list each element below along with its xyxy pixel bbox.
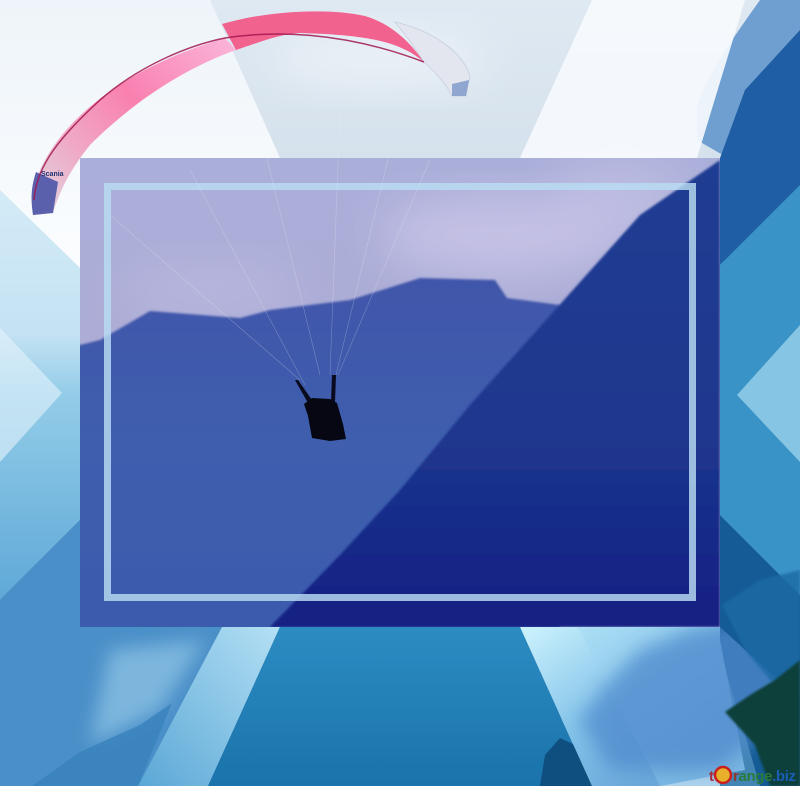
bottom left band bbox=[138, 627, 280, 786]
left diamond bbox=[0, 328, 62, 462]
central translucent panel bbox=[80, 158, 720, 627]
bottom left base bbox=[0, 520, 222, 786]
watermark: range.biz bbox=[733, 768, 796, 785]
right lower dark area bbox=[720, 515, 800, 786]
top left light panel bbox=[0, 0, 280, 268]
watermark bbox=[709, 767, 796, 785]
pilot bbox=[295, 375, 346, 441]
paraglider canopy: Scania bbox=[41, 171, 64, 178]
suspension lines bbox=[110, 110, 430, 385]
near mountain slope bbox=[270, 160, 720, 627]
misty ridge right bbox=[722, 570, 800, 700]
green tree bbox=[725, 660, 800, 786]
bottom right light beam bbox=[520, 627, 773, 786]
watermark: t bbox=[709, 768, 714, 785]
left side panel bbox=[0, 190, 80, 600]
right side panel bbox=[720, 185, 800, 595]
inner frame bbox=[108, 186, 692, 598]
paraglider canopy bbox=[32, 11, 470, 215]
top right light panel bbox=[520, 0, 745, 158]
bottom centre panel bbox=[208, 627, 592, 786]
bottom left lighter sweep bbox=[90, 640, 205, 745]
right diamond bbox=[737, 325, 800, 462]
bottom left dark ridge bbox=[32, 703, 172, 786]
bottom centre tree bbox=[540, 738, 592, 786]
upper right mountain slope bbox=[720, 30, 800, 265]
